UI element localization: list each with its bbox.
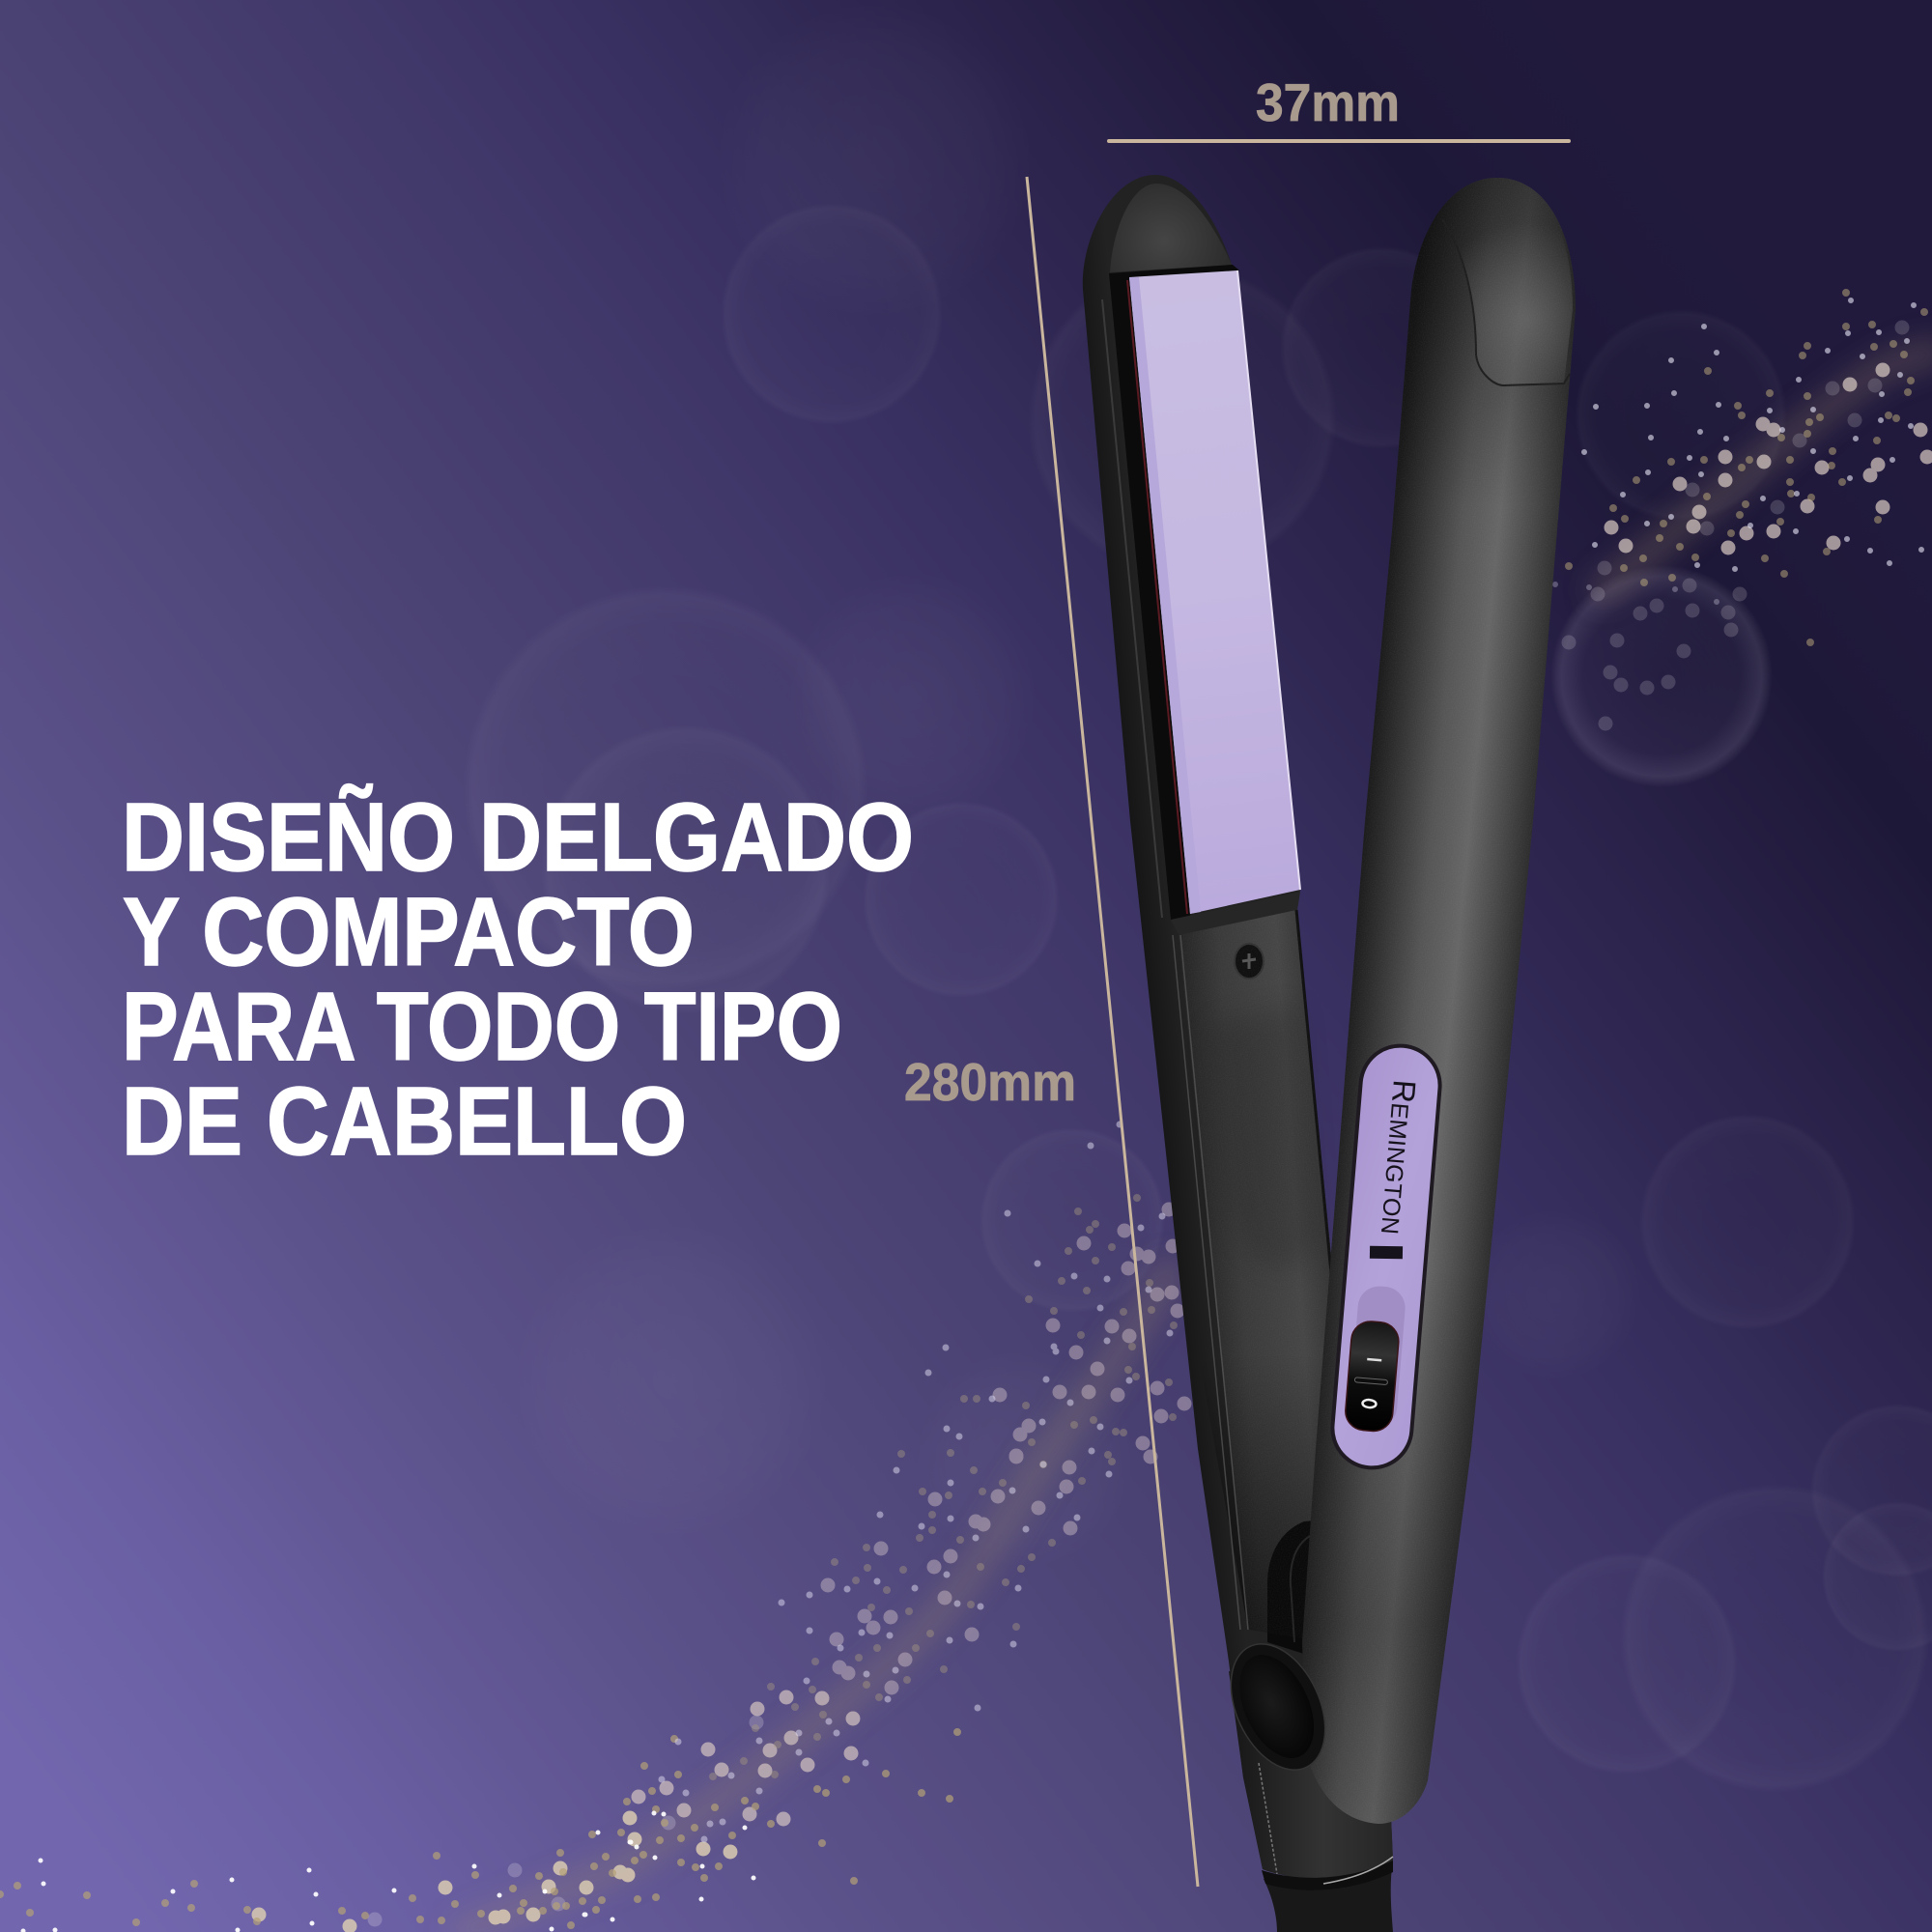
plate channel bbox=[1109, 265, 1239, 920]
width label: 37mm: 37mm bbox=[1256, 72, 1400, 132]
tip seam bbox=[1442, 219, 1570, 385]
heading: DE CABELLO bbox=[122, 1067, 687, 1176]
heading: PARA TODO TIPO bbox=[122, 973, 842, 1081]
glitter trail: glow bbox=[464, 352, 1932, 1932]
temperature knob bbox=[1212, 1629, 1344, 1785]
width dimension line bbox=[1109, 139, 1569, 143]
heating plate bbox=[1129, 270, 1300, 914]
plate end band bbox=[1171, 892, 1300, 935]
tip highlight bbox=[1442, 184, 1573, 384]
panel lower shade bbox=[1198, 1352, 1343, 1642]
arm body bbox=[1302, 178, 1576, 1824]
bokeh circles bbox=[463, 0, 1932, 1793]
glitter trail: upper-right sweep bbox=[1555, 293, 1927, 724]
shading bbox=[1302, 178, 1576, 1824]
lower panel bbox=[1179, 910, 1333, 1642]
heading bbox=[122, 783, 914, 1176]
badge plate bbox=[1329, 1042, 1443, 1471]
heading: Y COMPACTO bbox=[123, 878, 695, 986]
dome tip bbox=[1110, 184, 1232, 272]
length label: 280mm: 280mm bbox=[904, 1052, 1076, 1112]
neck bbox=[1229, 1671, 1393, 1878]
hinge bbox=[1267, 1520, 1328, 1662]
power switch bbox=[1344, 1320, 1400, 1433]
plate end highlight bbox=[1237, 270, 1300, 890]
brand bar bbox=[1370, 1246, 1403, 1259]
plate bevel bbox=[1129, 277, 1201, 914]
cable bbox=[1264, 1861, 1393, 1932]
panel shadow arc bbox=[1209, 1005, 1319, 1268]
glitter trail: lower-left sweep bbox=[0, 1124, 1184, 1931]
screw bbox=[1235, 944, 1264, 979]
arm body bbox=[1083, 175, 1393, 1878]
brand name: REMINGTON bbox=[1375, 1078, 1423, 1236]
collar bbox=[1262, 1857, 1393, 1890]
panel right edge line bbox=[1296, 910, 1331, 1273]
panel left ridge bbox=[1173, 935, 1248, 1630]
heading: DISEÑO DELGADO bbox=[122, 783, 914, 892]
switch recess bbox=[1349, 1285, 1406, 1429]
length dimension line bbox=[1027, 177, 1198, 1887]
plate red edge bbox=[1127, 280, 1187, 914]
hair straightener: left arm bbox=[1083, 175, 1393, 1890]
arm side highlight bbox=[1102, 299, 1162, 918]
control badge bbox=[1329, 1042, 1443, 1471]
neck seam bbox=[1259, 1763, 1277, 1874]
hair straightener: right arm bbox=[1302, 178, 1576, 1824]
arm grain bbox=[1302, 178, 1576, 1824]
body grain bbox=[1179, 910, 1333, 1642]
